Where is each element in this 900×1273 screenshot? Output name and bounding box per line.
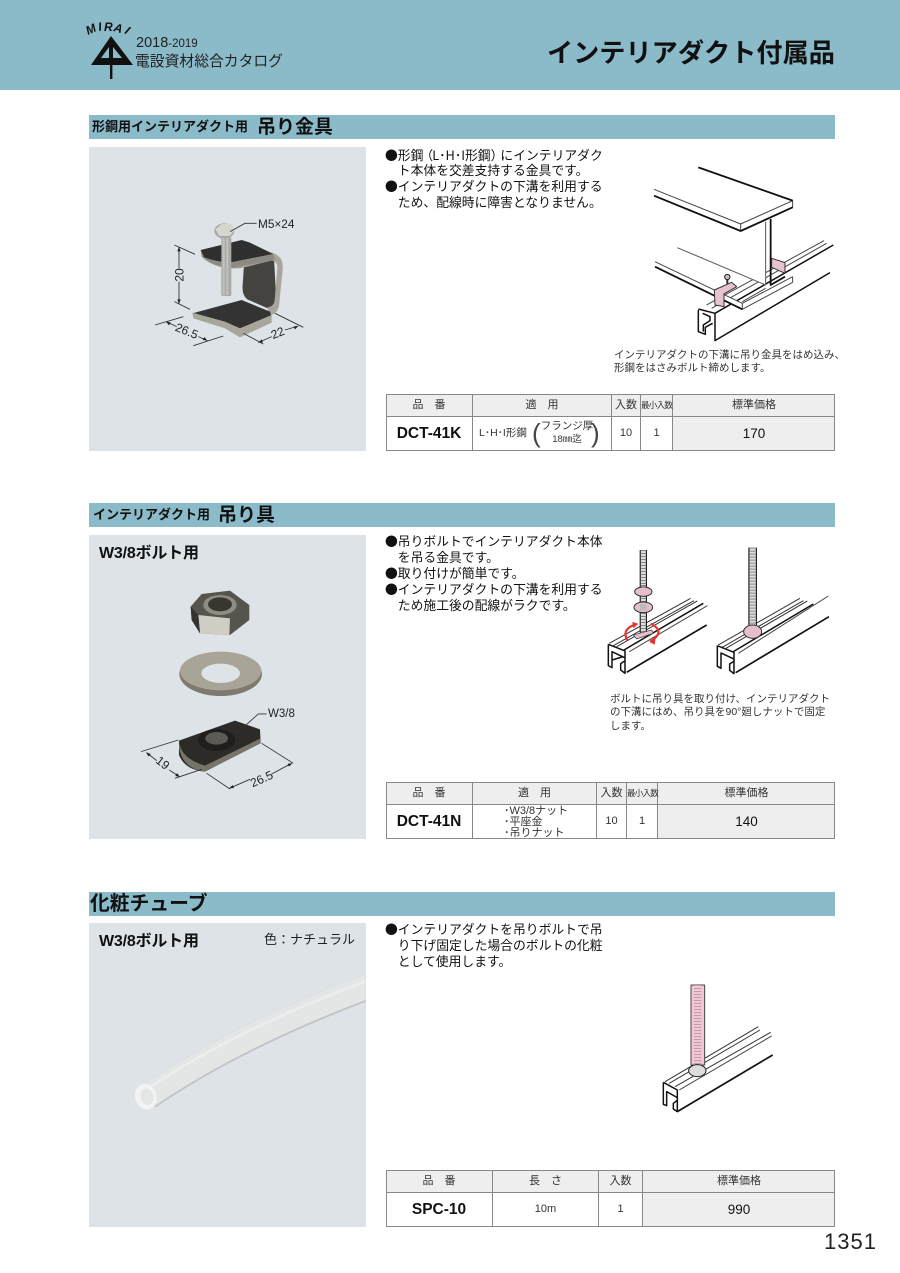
spec table DCT-41N: 10 (605, 815, 618, 827)
catalog name: 電設資材総合カタログ (135, 54, 283, 70)
illustration caption: の下溝にはめ、吊り具を90°廻しナットで固定 (610, 706, 825, 718)
dimension 26.5: 26.5 (248, 768, 275, 790)
spec table SPC-10: 10m (535, 1203, 556, 1215)
spec table DCT-41N: 最小入数 (627, 788, 658, 798)
section heading: hanger: 吊り具 (218, 505, 275, 526)
logo: MIRAI triangle mark: MIRAI (83, 19, 133, 38)
spec table DCT-41K: ) (591, 418, 600, 448)
section heading: cosmetic tube (89, 892, 835, 916)
section heading: hanger bracket (89, 115, 835, 139)
dimension 19: 19 (153, 753, 172, 773)
spec table DCT-41N: DCT-41N (397, 813, 461, 830)
spec table DCT-41K: 1 (653, 427, 660, 439)
illustration caption: ボルトに吊り具を取り付け、インテリアダクト (610, 693, 830, 705)
spec table SPC-10: 長 さ (529, 1175, 562, 1187)
dimension 26.5: 26.5 (173, 320, 200, 342)
photo panel: tube (89, 923, 366, 1227)
spec table SPC-10: 1 (617, 1203, 624, 1215)
spec table DCT-41K (386, 394, 835, 451)
photo panel: hanger parts (89, 535, 366, 839)
photo: white tube (135, 974, 366, 1110)
description text (385, 919, 603, 970)
description text: として使用します。 (398, 951, 511, 970)
spec table DCT-41K: ( (532, 418, 541, 448)
spec table SPC-10: 入数 (610, 1175, 632, 1187)
illustration caption: します。 (610, 720, 651, 732)
description text: ●インテリアダクトの下溝を利用する (385, 176, 603, 195)
spec table DCT-41K: 入数 (615, 399, 637, 411)
description text: ため、配線時に障害となりません。 (398, 192, 602, 211)
catalog year: 2018-2019 (136, 35, 198, 51)
description text: ため施工後の配線がラクです。 (398, 595, 576, 614)
spec table DCT-41K: 170 (743, 426, 765, 441)
spec table SPC-10: 品 番 (422, 1175, 456, 1187)
section heading: hanger bracket: 形鋼用インテリアダクト用 (92, 119, 248, 134)
dimension 22: 22 (269, 324, 286, 342)
photo panel: bracket (89, 147, 366, 451)
page number: 1351 (824, 1229, 877, 1254)
spec table DCT-41N: 適 用 (518, 787, 551, 799)
section heading: hanger (89, 503, 835, 527)
spec table DCT-41K: 最小入数 (641, 400, 672, 410)
description text: ●形鋼（L･H･I形鋼）にインテリアダク (385, 144, 603, 164)
description text: ●インテリアダクトを吊りボルトで吊 (385, 919, 603, 938)
spec table DCT-41N: 1 (639, 815, 645, 827)
panel label: W3/8ボルト用 (99, 933, 199, 950)
spec table DCT-41N: ･吊りナット (504, 826, 564, 838)
spec table DCT-41K: 適 用 (526, 399, 558, 411)
spec table DCT-41N: 標準価格 (724, 787, 768, 799)
description text: ト本体を交差支持する金具です。 (398, 160, 588, 179)
spec table DCT-41K: L･H･I形鋼 (479, 427, 527, 439)
spec table DCT-41N: ･W3/8ナット (504, 804, 568, 816)
spec table DCT-41K: 品 番 (412, 399, 446, 411)
spec table DCT-41N: 品 番 (412, 787, 446, 799)
description text (385, 144, 603, 211)
spec table DCT-41N: ･平座金 (504, 816, 542, 828)
description text (385, 531, 603, 614)
page title: インテリアダクト付属品 (547, 38, 835, 68)
spec table DCT-41K: 10 (620, 427, 632, 439)
header band (0, 0, 900, 90)
panel label: W3/8ボルト用 (99, 545, 199, 562)
spec table SPC-10 (386, 1170, 835, 1227)
spec table DCT-41K: 18㎜迄 (552, 434, 582, 445)
description text: ●取り付けが簡単です。 (385, 563, 524, 582)
dimension 20: 20 (173, 268, 187, 282)
illustration caption (614, 349, 845, 374)
description text: を吊る金具です。 (398, 547, 499, 566)
illustration caption: インテリアダクトの下溝に吊り金具をはめ込み、 (614, 349, 845, 361)
spec table DCT-41N (386, 782, 835, 839)
spec table DCT-41N: 140 (735, 814, 758, 829)
illustration caption (610, 693, 830, 732)
description text: ●吊りボルトでインテリアダクト本体 (385, 531, 603, 550)
section heading: cosmetic tube: 化粧チューブ (90, 893, 208, 915)
spec table SPC-10: SPC-10 (412, 1201, 466, 1218)
spec table DCT-41N: 入数 (600, 787, 622, 799)
section heading: hanger bracket: 吊り金具 (257, 117, 333, 138)
spec table SPC-10: 標準価格 (717, 1175, 761, 1187)
dimension M5x24: M5×24 (258, 217, 294, 231)
logo: MIRAI triangle mark (83, 19, 133, 79)
color note: 色：ナチュラル (264, 932, 355, 947)
description text: ●インテリアダクトの下溝を利用する (385, 579, 603, 598)
spec table DCT-41K: フランジ厚 (541, 420, 593, 432)
section heading: hanger: インテリアダクト用 (93, 507, 210, 522)
spec table SPC-10: 990 (728, 1202, 750, 1217)
dimension W3/8: W3/8 (268, 708, 295, 720)
description text: り下げ固定した場合のボルトの化粧 (398, 935, 603, 954)
illustration caption: 形鋼をはさみボルト締めします。 (614, 362, 770, 374)
spec table DCT-41K: 標準価格 (732, 399, 776, 411)
spec table DCT-41K: DCT-41K (397, 425, 461, 442)
